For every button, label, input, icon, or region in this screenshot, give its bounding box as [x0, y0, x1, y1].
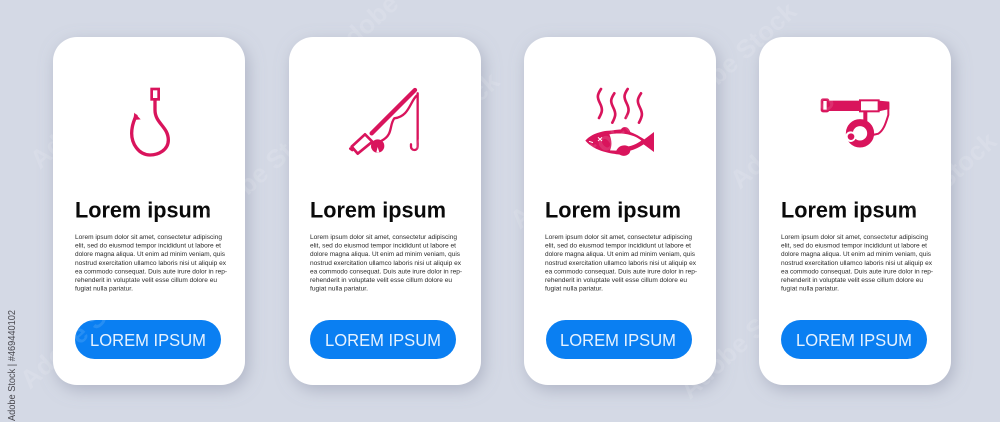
text block: [310, 234, 462, 293]
button: LOREM IPSUM: [90, 330, 206, 350]
text block: nostrud exercitation ullamco laboris nisi ut aliquip ex: [781, 260, 933, 267]
heading: Lorem ipsum: [781, 198, 917, 222]
button: [781, 320, 927, 359]
text block: ea commodo consequat. Duis aute irure dolor in rep-: [781, 268, 933, 275]
watermark: Adobe Stock: [724, 65, 863, 194]
text block: elit, sed do eiusmod tempor incididunt ut labore et: [310, 243, 456, 250]
text block: dolore magna aliqua. Ut enim ad minim veniam, quis: [781, 251, 931, 258]
icon: fishing hook: [132, 89, 168, 155]
text block: rehenderit in voluptate velit esse cillum dolore eu: [545, 277, 687, 284]
text block: Lorem ipsum dolor sit amet, consectetur adipiscing: [75, 234, 222, 241]
button: LOREM IPSUM: [560, 330, 676, 350]
text block: rehenderit in voluptate velit esse cillum dolore eu: [75, 277, 217, 284]
panel: fishing reel: [759, 37, 951, 385]
text block: nostrud exercitation ullamco laboris nisi ut aliquip ex: [75, 260, 227, 267]
text block: ea commodo consequat. Duis aute irure dolor in rep-: [75, 268, 227, 275]
button: [310, 320, 456, 359]
text block: dolore magna aliqua. Ut enim ad minim veniam, quis: [545, 251, 695, 258]
stock id: Adobe Stock | #469440102: [6, 310, 18, 421]
heading: Lorem ipsum: [75, 198, 211, 222]
text block: elit, sed do eiusmod tempor incididunt ut labore et: [75, 243, 221, 250]
panel: hook: [53, 37, 245, 385]
text block: [545, 234, 697, 293]
button: [75, 320, 221, 359]
icon: fishing rod: [350, 90, 418, 154]
text block: nostrud exercitation ullamco laboris nisi ut aliquip ex: [545, 260, 697, 267]
text block: [75, 234, 227, 293]
text block: dolore magna aliqua. Ut enim ad minim veniam, quis: [75, 251, 225, 258]
text block: dolore magna aliqua. Ut enim ad minim veniam, quis: [310, 251, 460, 258]
text block: Lorem ipsum dolor sit amet, consectetur adipiscing: [545, 234, 692, 241]
watermark: Adobe Stock: [14, 265, 153, 394]
text block: elit, sed do eiusmod tempor incididunt ut labore et: [545, 243, 691, 250]
icon: smelly fish: [585, 89, 654, 156]
watermark: Adobe Stock: [24, 45, 163, 174]
watermark: Adobe Stock: [367, 65, 506, 194]
panel: smelly fish: [524, 37, 716, 385]
panel: fishing rod: [289, 37, 481, 385]
text block: fugiat nulla pariatur.: [545, 286, 603, 293]
watermark: Adobe Stock: [194, 105, 333, 234]
watermark: Adobe Stock: [864, 125, 1000, 254]
heading: Lorem ipsum: [310, 198, 446, 222]
text block: nostrud exercitation ullamco laboris nisi ut aliquip ex: [310, 260, 462, 267]
heading: Lorem ipsum: [545, 198, 681, 222]
icon: fishing reel: [822, 100, 889, 144]
button: [546, 320, 692, 359]
text block: rehenderit in voluptate velit esse cillum dolore eu: [310, 277, 452, 284]
text block: Lorem ipsum dolor sit amet, consectetur adipiscing: [781, 234, 928, 241]
text block: ea commodo consequat. Duis aute irure dolor in rep-: [310, 268, 462, 275]
text block: fugiat nulla pariatur.: [75, 286, 133, 293]
text block: [781, 234, 933, 293]
watermark: Adobe Stock: [674, 275, 813, 404]
button: LOREM IPSUM: [325, 330, 441, 350]
text block: fugiat nulla pariatur.: [310, 286, 368, 293]
text block: fugiat nulla pariatur.: [781, 286, 839, 293]
text block: elit, sed do eiusmod tempor incididunt ut labore et: [781, 243, 927, 250]
button: LOREM IPSUM: [796, 330, 912, 350]
watermark: Adobe Stock: [504, 105, 643, 234]
text block: ea commodo consequat. Duis aute irure dolor in rep-: [545, 268, 697, 275]
text block: Lorem ipsum dolor sit amet, consectetur adipiscing: [310, 234, 457, 241]
text block: rehenderit in voluptate velit esse cillum dolore eu: [781, 277, 923, 284]
